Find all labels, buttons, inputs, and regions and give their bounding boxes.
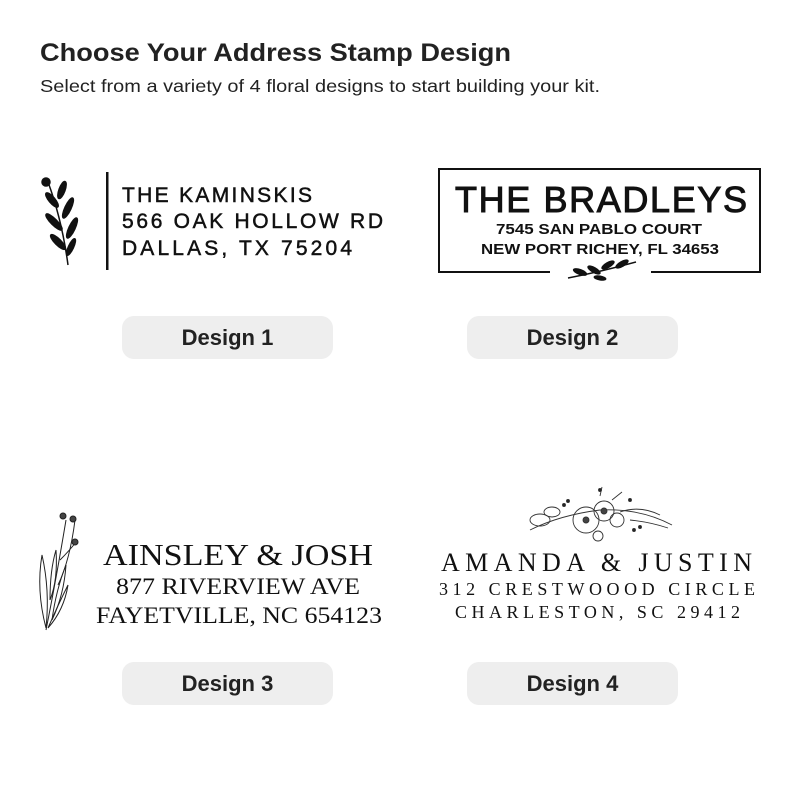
address text: 312 CRESTWOOOD CIRCLE	[439, 579, 755, 599]
button: design 3: Design 3	[182, 671, 273, 696]
button: design 2	[467, 316, 678, 359]
button: design 4	[467, 662, 678, 705]
frame	[439, 169, 760, 272]
subtitle: Select from a variety of 4 floral designs to start building your kit.	[40, 76, 600, 96]
icon: wildflower stem	[40, 513, 78, 630]
button: design 1	[122, 316, 333, 359]
address text: AMANDA & JUSTIN	[441, 548, 752, 577]
address text: DALLAS, TX 75204	[122, 237, 352, 260]
address text	[439, 548, 755, 622]
address text	[122, 184, 383, 260]
divider line	[106, 172, 108, 270]
name: THE BRADLEYS	[455, 179, 747, 220]
address text: CHARLESTON, SC 29412	[455, 602, 740, 622]
address text: 566 OAK HOLLOW RD	[122, 210, 383, 233]
design 2 stamp	[439, 169, 760, 281]
address text: AINSLEY & JOSH	[103, 537, 373, 572]
icon: small leaf sprig	[568, 258, 636, 281]
button: design 2: Design 2	[527, 325, 618, 350]
design 2 stamp: NEW PORT RICHEY, FL 34653	[481, 241, 719, 258]
button: design 3	[122, 662, 333, 705]
address: 7545 SAN PABLO COURT	[496, 221, 702, 238]
design 4 stamp	[439, 487, 755, 622]
address text: 877 RIVERVIEW AVE	[116, 574, 360, 599]
address text	[96, 537, 382, 628]
address text: FAYETVILLE, NC 654123	[96, 603, 382, 628]
button: design 1: Design 1	[182, 325, 273, 350]
title: Choose Your Address Stamp Design	[40, 39, 511, 67]
design 1 stamp	[42, 172, 383, 270]
address text: THE KAMINSKIS	[122, 184, 312, 207]
icon: floral bouquet	[530, 487, 672, 541]
design 3 stamp	[40, 513, 382, 630]
icon: leaf branch	[42, 178, 79, 265]
button: design 4: Design 4	[527, 671, 619, 696]
